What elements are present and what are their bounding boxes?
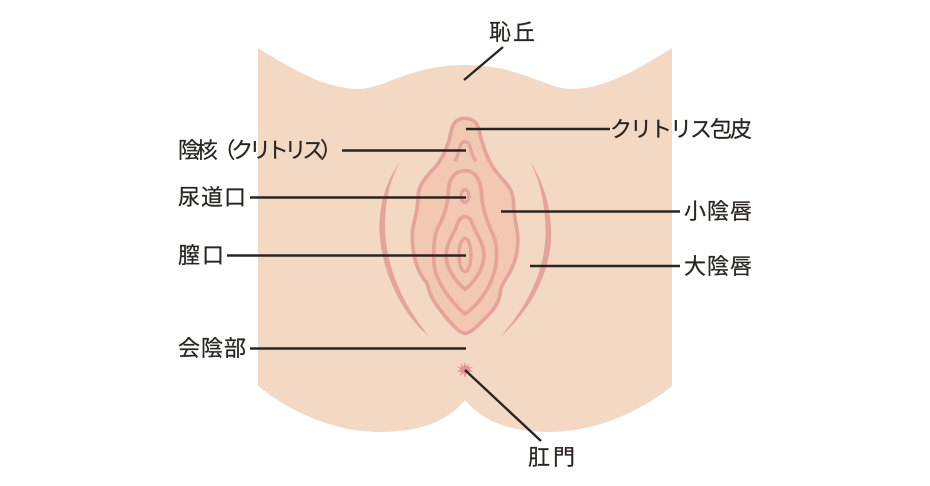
labia minora and clitoral hood outline [412, 118, 518, 333]
label: 大陰唇: 大陰唇 [684, 254, 752, 279]
label: 陰核: 陰核（クリトリス） [178, 138, 342, 163]
vaginal opening [459, 238, 471, 272]
label: 会陰部: 会陰部 [178, 336, 246, 361]
labia majora left [379, 162, 429, 337]
label: 小陰唇: 小陰唇 [684, 199, 752, 224]
label: 恥丘: 恥丘 [489, 20, 535, 45]
label: 膣口: 膣口 [178, 243, 224, 268]
label: 尿道口: 尿道口 [178, 185, 246, 210]
icon: anus [457, 362, 473, 378]
vestibule contour [446, 217, 484, 289]
urethral opening [461, 190, 469, 202]
leader lines [227, 47, 680, 441]
clitoris [455, 142, 475, 160]
body silhouette [258, 48, 672, 432]
illustration: genital anatomy [379, 118, 551, 337]
inner labia contour [434, 171, 497, 314]
label: クリトリス包皮: クリトリス包皮 [610, 117, 752, 142]
label: 肛門: 肛門 [528, 445, 575, 470]
labia majora right [501, 162, 551, 337]
